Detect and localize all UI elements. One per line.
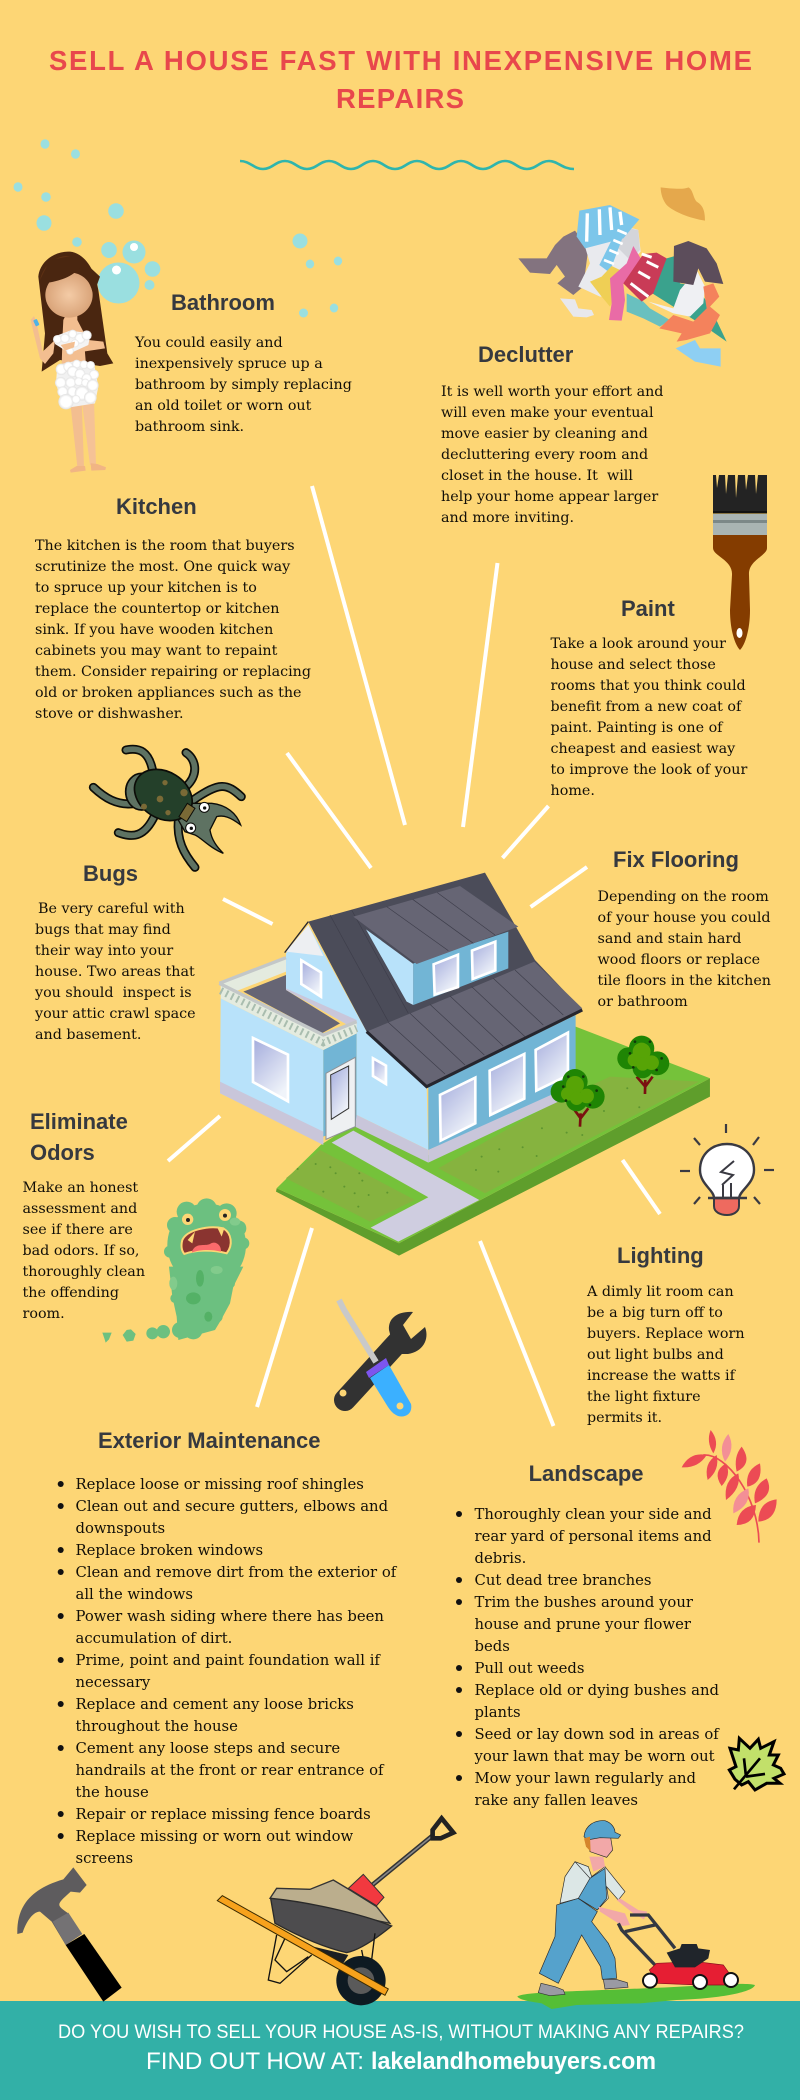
text: landscape list: rake any fallen leaves — [474, 1792, 638, 1809]
text: exterior list: Replace broken windows — [76, 1542, 263, 1559]
text: declutter body: and more inviting. — [441, 510, 574, 526]
panel: kitchen — [35, 494, 311, 722]
icon: paint brush — [713, 475, 767, 650]
windows — [253, 942, 568, 1141]
heading: bathroom: Bathroom — [171, 290, 275, 315]
text: odors body: Make an honest — [22, 1180, 138, 1196]
text: odors body: assessment and — [22, 1201, 137, 1217]
text: lighting body: be a big turn off to — [587, 1305, 723, 1321]
text: odors body: room. — [22, 1306, 65, 1322]
text: paint body: paint. Painting is one of — [550, 720, 724, 736]
text: kitchen body: them. Consider repairing or replacing — [35, 664, 311, 680]
text: exterior list: the house — [76, 1784, 149, 1801]
text: bugs body: bugs that may find — [35, 922, 171, 938]
text: fix flooring body: wood floors or replace — [598, 952, 760, 968]
icon: soap bubbles — [14, 139, 342, 318]
balcony — [243, 975, 340, 1033]
text: exterior list: Clean and remove dirt from the exterior of — [76, 1564, 398, 1581]
icon: hammer — [17, 1867, 122, 2002]
text: fix flooring body: of your house you could — [598, 910, 771, 926]
text: exterior list: accumulation of dirt. — [76, 1630, 232, 1647]
icon: maple leaf — [729, 1738, 784, 1790]
icon: green odor ghost — [102, 1198, 249, 1343]
panel: fix flooring — [598, 847, 771, 1010]
text: fix flooring body: Depending on the room — [598, 889, 769, 905]
text: lighting body: increase the watts if — [587, 1368, 737, 1384]
panel: eliminate odors — [22, 1109, 145, 1322]
heading: bugs: Bugs — [83, 861, 138, 886]
text: exterior list: Replace loose or missing roof shingles — [76, 1476, 364, 1493]
text: declutter body: help your home appear larger — [441, 489, 658, 505]
walkway — [332, 1131, 479, 1242]
text: paint body: house and select those — [550, 657, 716, 673]
bullet dots — [58, 1481, 64, 1839]
rays pointing at the house — [168, 486, 660, 1426]
icon: beetle bug — [93, 749, 241, 867]
text: lighting body: buyers. Replace worn — [587, 1326, 745, 1342]
text: declutter body: It is well worth your effort and — [441, 384, 663, 400]
bullet dots — [456, 1511, 462, 1781]
text: odors body: see if there are — [22, 1222, 133, 1238]
heading: eliminate odors: Odors — [30, 1140, 95, 1165]
walls — [220, 998, 323, 1143]
text: odors body: the offending — [22, 1285, 119, 1301]
panel: paint — [550, 596, 747, 799]
dormer — [366, 929, 413, 1005]
text: bugs body: you should inspect is — [34, 985, 192, 1001]
panel: declutter — [441, 342, 663, 526]
text: declutter body: will even make your eventual — [441, 405, 654, 421]
heading: lighting: Lighting — [617, 1243, 704, 1268]
text: exterior list: screens — [76, 1850, 133, 1867]
text: kitchen body: cabinets you may want to repaint — [35, 643, 278, 659]
text: exterior list: handrails at the front or rear entrance of — [76, 1762, 385, 1779]
text: exterior list: Replace missing or worn out window — [76, 1828, 354, 1845]
text: landscape list: Pull out weeds — [474, 1660, 584, 1677]
title: REPAIRS — [336, 83, 464, 114]
trees — [551, 1036, 669, 1127]
text: bugs body: your attic crawl space — [34, 1006, 196, 1022]
text: bugs body: and basement. — [35, 1027, 141, 1043]
text: bugs body: house. Two areas that — [35, 964, 195, 980]
text: landscape list: debris. — [474, 1550, 526, 1567]
text: declutter body: closet in the house. It will — [441, 468, 633, 484]
illustration: isometric house — [219, 873, 710, 1256]
text: odors body: bad odors. If so, — [22, 1243, 139, 1259]
title — [49, 45, 752, 114]
text: kitchen body: replace the countertop or kitchen — [35, 601, 280, 617]
text: lighting body: the light fixture — [587, 1389, 701, 1405]
text: landscape list: Cut dead tree branches — [474, 1572, 652, 1589]
panel: bathroom — [134, 290, 352, 435]
text: landscape list: Trim the bushes around your — [474, 1594, 694, 1611]
heading: fix flooring: Fix Flooring — [613, 847, 739, 872]
text: exterior list: Power wash siding where there has been — [76, 1608, 384, 1625]
text: kitchen body: The kitchen is the room that buyers — [35, 538, 295, 554]
text: landscape list: Mow your lawn regularly and — [474, 1770, 697, 1787]
text: exterior list: Repair or replace missing fence boards — [76, 1806, 371, 1823]
text: exterior list: Prime, point and paint foundation wall if — [76, 1652, 381, 1669]
text: declutter body: move easier by cleaning and — [441, 426, 648, 442]
text: paint body: cheapest and easiest way — [550, 741, 736, 757]
text: lighting body: permits it. — [587, 1410, 662, 1426]
text: exterior list: Clean out and secure gutters, elbows and — [76, 1498, 389, 1515]
icon: wheelbarrow with shovel — [217, 1818, 453, 2005]
icon: light bulb — [680, 1124, 774, 1215]
heading: exterior maintenance: Exterior Maintenance — [98, 1428, 321, 1453]
icon: wrench and screwdriver — [339, 1300, 426, 1416]
text: lighting body: out light bulbs and — [587, 1347, 724, 1363]
text: bugs body: Be very careful with — [38, 901, 185, 917]
text: exterior list: Replace and cement any loose bricks — [76, 1696, 354, 1713]
text: paint body: to improve the look of your — [550, 762, 747, 778]
text: exterior list: necessary — [76, 1674, 151, 1691]
text: paint body: home. — [550, 783, 595, 799]
text: exterior list: throughout the house — [76, 1718, 238, 1735]
panel: lighting — [586, 1243, 745, 1426]
heading: kitchen: Kitchen — [116, 494, 197, 519]
banner text — [58, 2021, 744, 2075]
panel: bugs — [34, 861, 196, 1043]
door — [326, 1057, 355, 1139]
text: landscape list: Seed or lay down sod in areas of — [474, 1726, 720, 1743]
heading: paint: Paint — [621, 596, 675, 621]
text: fix flooring body: tile floors in the kitchen — [598, 973, 771, 989]
text: exterior list: Cement any loose steps and secure — [76, 1740, 340, 1757]
heading: eliminate odors: Eliminate — [30, 1109, 128, 1134]
heading: landscape: Landscape — [529, 1461, 644, 1486]
text: fix flooring body: or bathroom — [598, 994, 688, 1010]
text: landscape list: beds — [474, 1638, 510, 1655]
text: paint body: Take a look around your — [550, 636, 726, 652]
text: landscape list: your lawn that may be worn out — [474, 1748, 715, 1765]
text: bathroom body: an old toilet or worn out — [135, 398, 312, 414]
text: exterior list: downspouts — [76, 1520, 165, 1537]
icon: girl covered in foam — [31, 252, 113, 473]
text: odors body: thoroughly clean — [22, 1264, 145, 1280]
text: fix flooring body: sand and stain hard — [598, 931, 741, 947]
title: SELL A HOUSE FAST WITH INEXPENSIVE HOME — [49, 45, 752, 76]
heading: declutter: Declutter — [478, 342, 574, 367]
text: kitchen body: scrutinize the most. One quick way — [35, 559, 291, 575]
panel: landscape — [456, 1461, 720, 1809]
text: lighting body: A dimly lit room can — [586, 1284, 734, 1300]
icon: red leaves branch — [682, 1430, 777, 1543]
text: banner call to action: FIND OUT HOW AT: — [146, 2048, 364, 2075]
text: landscape list: Thoroughly clean your side and — [474, 1506, 712, 1523]
roof — [308, 873, 582, 1087]
text: kitchen body: old or broken appliances such as the — [35, 685, 302, 701]
wavy divider — [240, 161, 574, 169]
text: declutter body: decluttering every room and — [441, 447, 648, 463]
panel: exterior maintenance — [58, 1428, 398, 1867]
text: bathroom body: inexpensively spruce up a — [135, 356, 323, 372]
text: landscape list: Replace old or dying bushes and — [474, 1682, 719, 1699]
text: landscape list: house and prune your flower — [474, 1616, 692, 1633]
text: bathroom body: bathroom by simply replacing — [135, 377, 352, 393]
text: kitchen body: to spruce up your kitchen is to — [35, 580, 257, 596]
text: kitchen body: stove or dishwasher. — [35, 706, 184, 722]
icon: pile of clothes — [518, 187, 727, 367]
text: kitchen body: sink. If you have wooden kitchen — [35, 622, 273, 638]
text: paint body: rooms that you think could — [550, 678, 746, 694]
text: banner website: lakelandhomebuyers.com — [371, 2048, 656, 2075]
text: bugs body: their way into your — [35, 943, 173, 959]
text: landscape list: plants — [474, 1704, 521, 1721]
ground — [276, 1078, 710, 1256]
text: paint body: benefit from a new coat of — [550, 699, 743, 715]
icon: man mowing lawn — [517, 1821, 755, 2009]
text: bathroom body: You could easily and — [134, 335, 283, 351]
text: bathroom body: bathroom sink. — [135, 419, 244, 435]
text: landscape list: rear yard of personal items and — [474, 1528, 712, 1545]
text: exterior list: all the windows — [76, 1586, 193, 1603]
bottom banner background — [0, 2001, 800, 2100]
text: banner question: DO YOU WISH TO SELL YOUR HOUSE AS-IS, WITHOUT MAKING ANY REPAIRS? — [58, 2021, 744, 2043]
